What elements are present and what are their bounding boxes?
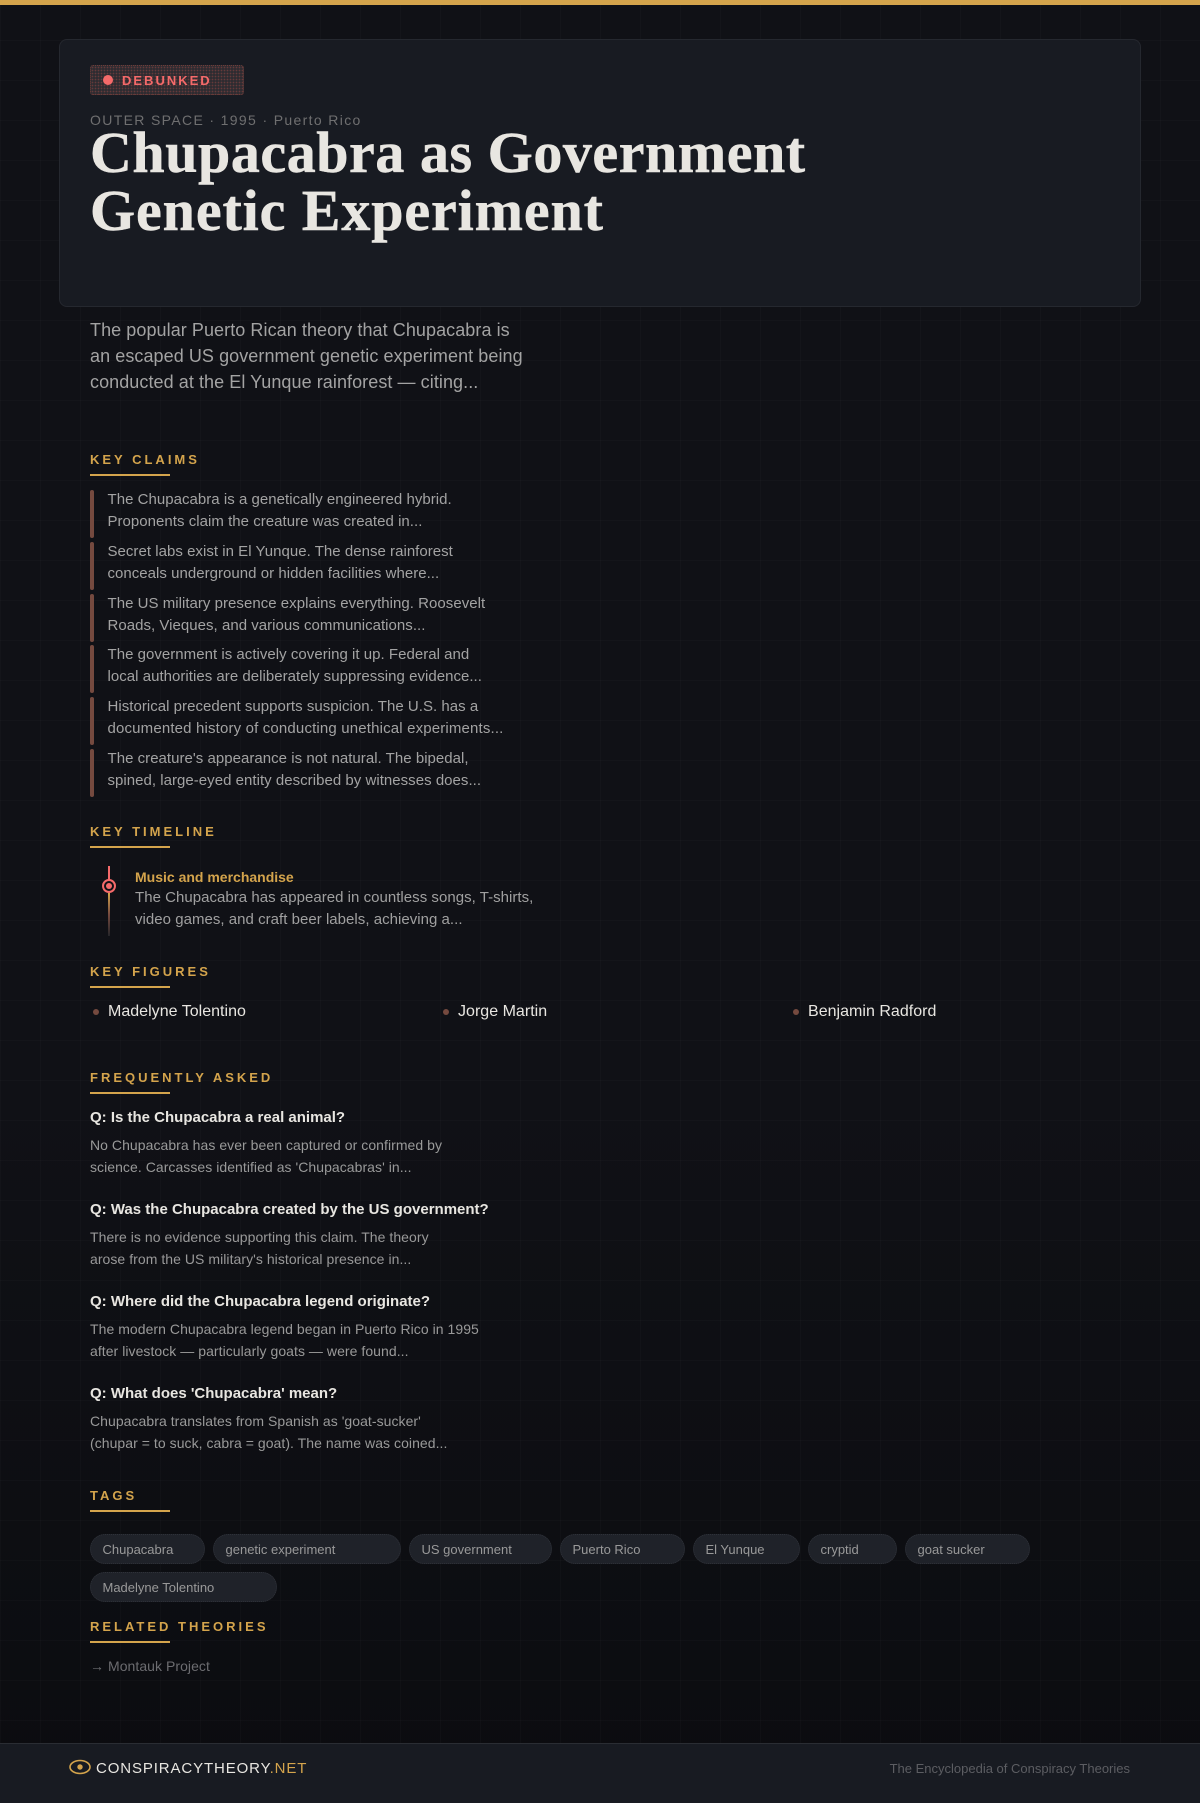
claim 4: The government is actively covering it up. Federal and [108,646,469,662]
tag: Puerto Rico [572,1542,640,1556]
claim 1: Proponents claim the creature was created in... [108,512,422,530]
faq 3: The modern Chupacabra legend began in Puerto Rico in 1995 [90,1321,479,1337]
faq 1: science. Carcasses identified as 'Chupacabras' in... [90,1159,412,1175]
timeline icon [102,866,116,936]
claim 3 [90,594,486,642]
faq 4: (chupar = to suck, cabra = goat). The name was coined... [90,1435,447,1451]
claim 2: Secret labs exist in El Yunque. The dense rainforest [108,542,453,560]
tag: Chupacabra [102,1542,173,1556]
claim 3: Roads, Vieques, and various communications... [108,616,425,634]
faq 3: after livestock — particularly goats — were found... [90,1343,409,1359]
claim 2: conceals underground or hidden facilities where... [108,564,439,582]
tag [213,1534,401,1564]
faq 3 [90,1293,479,1359]
claim 4 [90,645,482,693]
faq 4: Q: What does 'Chupacabra' mean? [90,1385,337,1402]
title: Chupacabra as Government [90,120,806,185]
badge dot [103,75,113,85]
figure 3: Benjamin Radford [808,1003,936,1020]
claim 5: documented history of conducting unethical experiments... [108,720,504,736]
figure 2: Jorge Martin [458,1003,547,1020]
timeline entry title: Music and merchandise [135,869,294,885]
faq 1 [90,1109,442,1175]
description: an escaped US government genetic experiment being [90,346,523,366]
claim 6: The creature's appearance is not natural. The bipedal, [108,750,469,766]
claim 4: local authorities are deliberately suppressing evidence... [108,668,482,684]
tag [409,1534,552,1564]
icon: eye logo [69,1760,91,1774]
tag [90,1534,205,1564]
faq 3: Q: Where did the Chupacabra legend originate? [90,1293,430,1310]
related link: → Montauk Project [90,1658,210,1674]
faq 2: There is no evidence supporting this claim. The theory [90,1229,429,1245]
claim 5: Historical precedent supports suspicion. The U.S. has a [108,698,478,714]
claim 2 [90,542,453,590]
top accent bar [0,0,1200,5]
timeline entry text [135,889,533,928]
description [90,320,523,392]
tag: cryptid [820,1542,859,1556]
tag [90,1572,277,1602]
tag [905,1534,1030,1564]
panel: footer [0,1743,1200,1803]
title [90,120,806,243]
title: Genetic Experiment [90,178,604,243]
heading: key claims: KEY CLAIMS [90,452,200,467]
claim 1: The Chupacabra is a genetically engineered hybrid. [108,490,452,508]
heading: tags: TAGS [90,1488,137,1503]
tag: El Yunque [706,1542,765,1556]
heading: key figures: KEY FIGURES [90,964,211,979]
timeline entry text: video games, and craft beer labels, achieving a... [135,911,463,928]
tag: genetic experiment [226,1542,335,1556]
figure 1: Madelyne Tolentino [108,1003,246,1020]
description: The popular Puerto Rican theory that Chupacabra is [90,320,510,340]
tag: goat sucker [918,1542,985,1556]
claim 5 [90,697,504,745]
panel: header card [59,39,1141,307]
timeline entry text: The Chupacabra has appeared in countless songs, T-shirts, [135,889,533,906]
footer tagline: The Encyclopedia of Conspiracy Theories [890,1760,1130,1776]
heading: related theories: RELATED THEORIES [90,1619,268,1634]
claim 1 [90,490,452,538]
faq 4: Chupacabra translates from Spanish as 'goat-sucker' [90,1413,421,1429]
faq 2: Q: Was the Chupacabra created by the US government? [90,1201,489,1218]
meta line: OUTER SPACE · 1995 · Puerto Rico [90,112,362,128]
badge label: DEBUNKED [122,72,212,88]
tag [808,1534,897,1564]
claim 3: The US military presence explains everything. Roosevelt [108,594,485,612]
timeline entry [135,869,533,928]
tag: US government [422,1542,512,1556]
description: conducted at the El Yunque rainforest — citing... [90,372,478,392]
tag [560,1534,685,1564]
faq 2: arose from the US military's historical presence in... [90,1251,411,1267]
faq 1: No Chupacabra has ever been captured or confirmed by [90,1137,442,1153]
heading: key timeline: KEY TIMELINE [90,824,217,839]
claim 6 [90,749,481,797]
faq 1: Q: Is the Chupacabra a real animal? [90,1109,345,1126]
faq 4 [90,1385,447,1451]
footer logo text: CONSPIRACYTHEORY.NET [96,1760,307,1776]
badge: debunked [90,65,244,95]
tag [693,1534,800,1564]
heading: frequently asked: FREQUENTLY ASKED [90,1070,273,1085]
faq 2 [90,1201,489,1267]
tag: Madelyne Tolentino [102,1580,214,1594]
claim 6: spined, large-eyed entity described by witnesses does... [108,772,481,788]
